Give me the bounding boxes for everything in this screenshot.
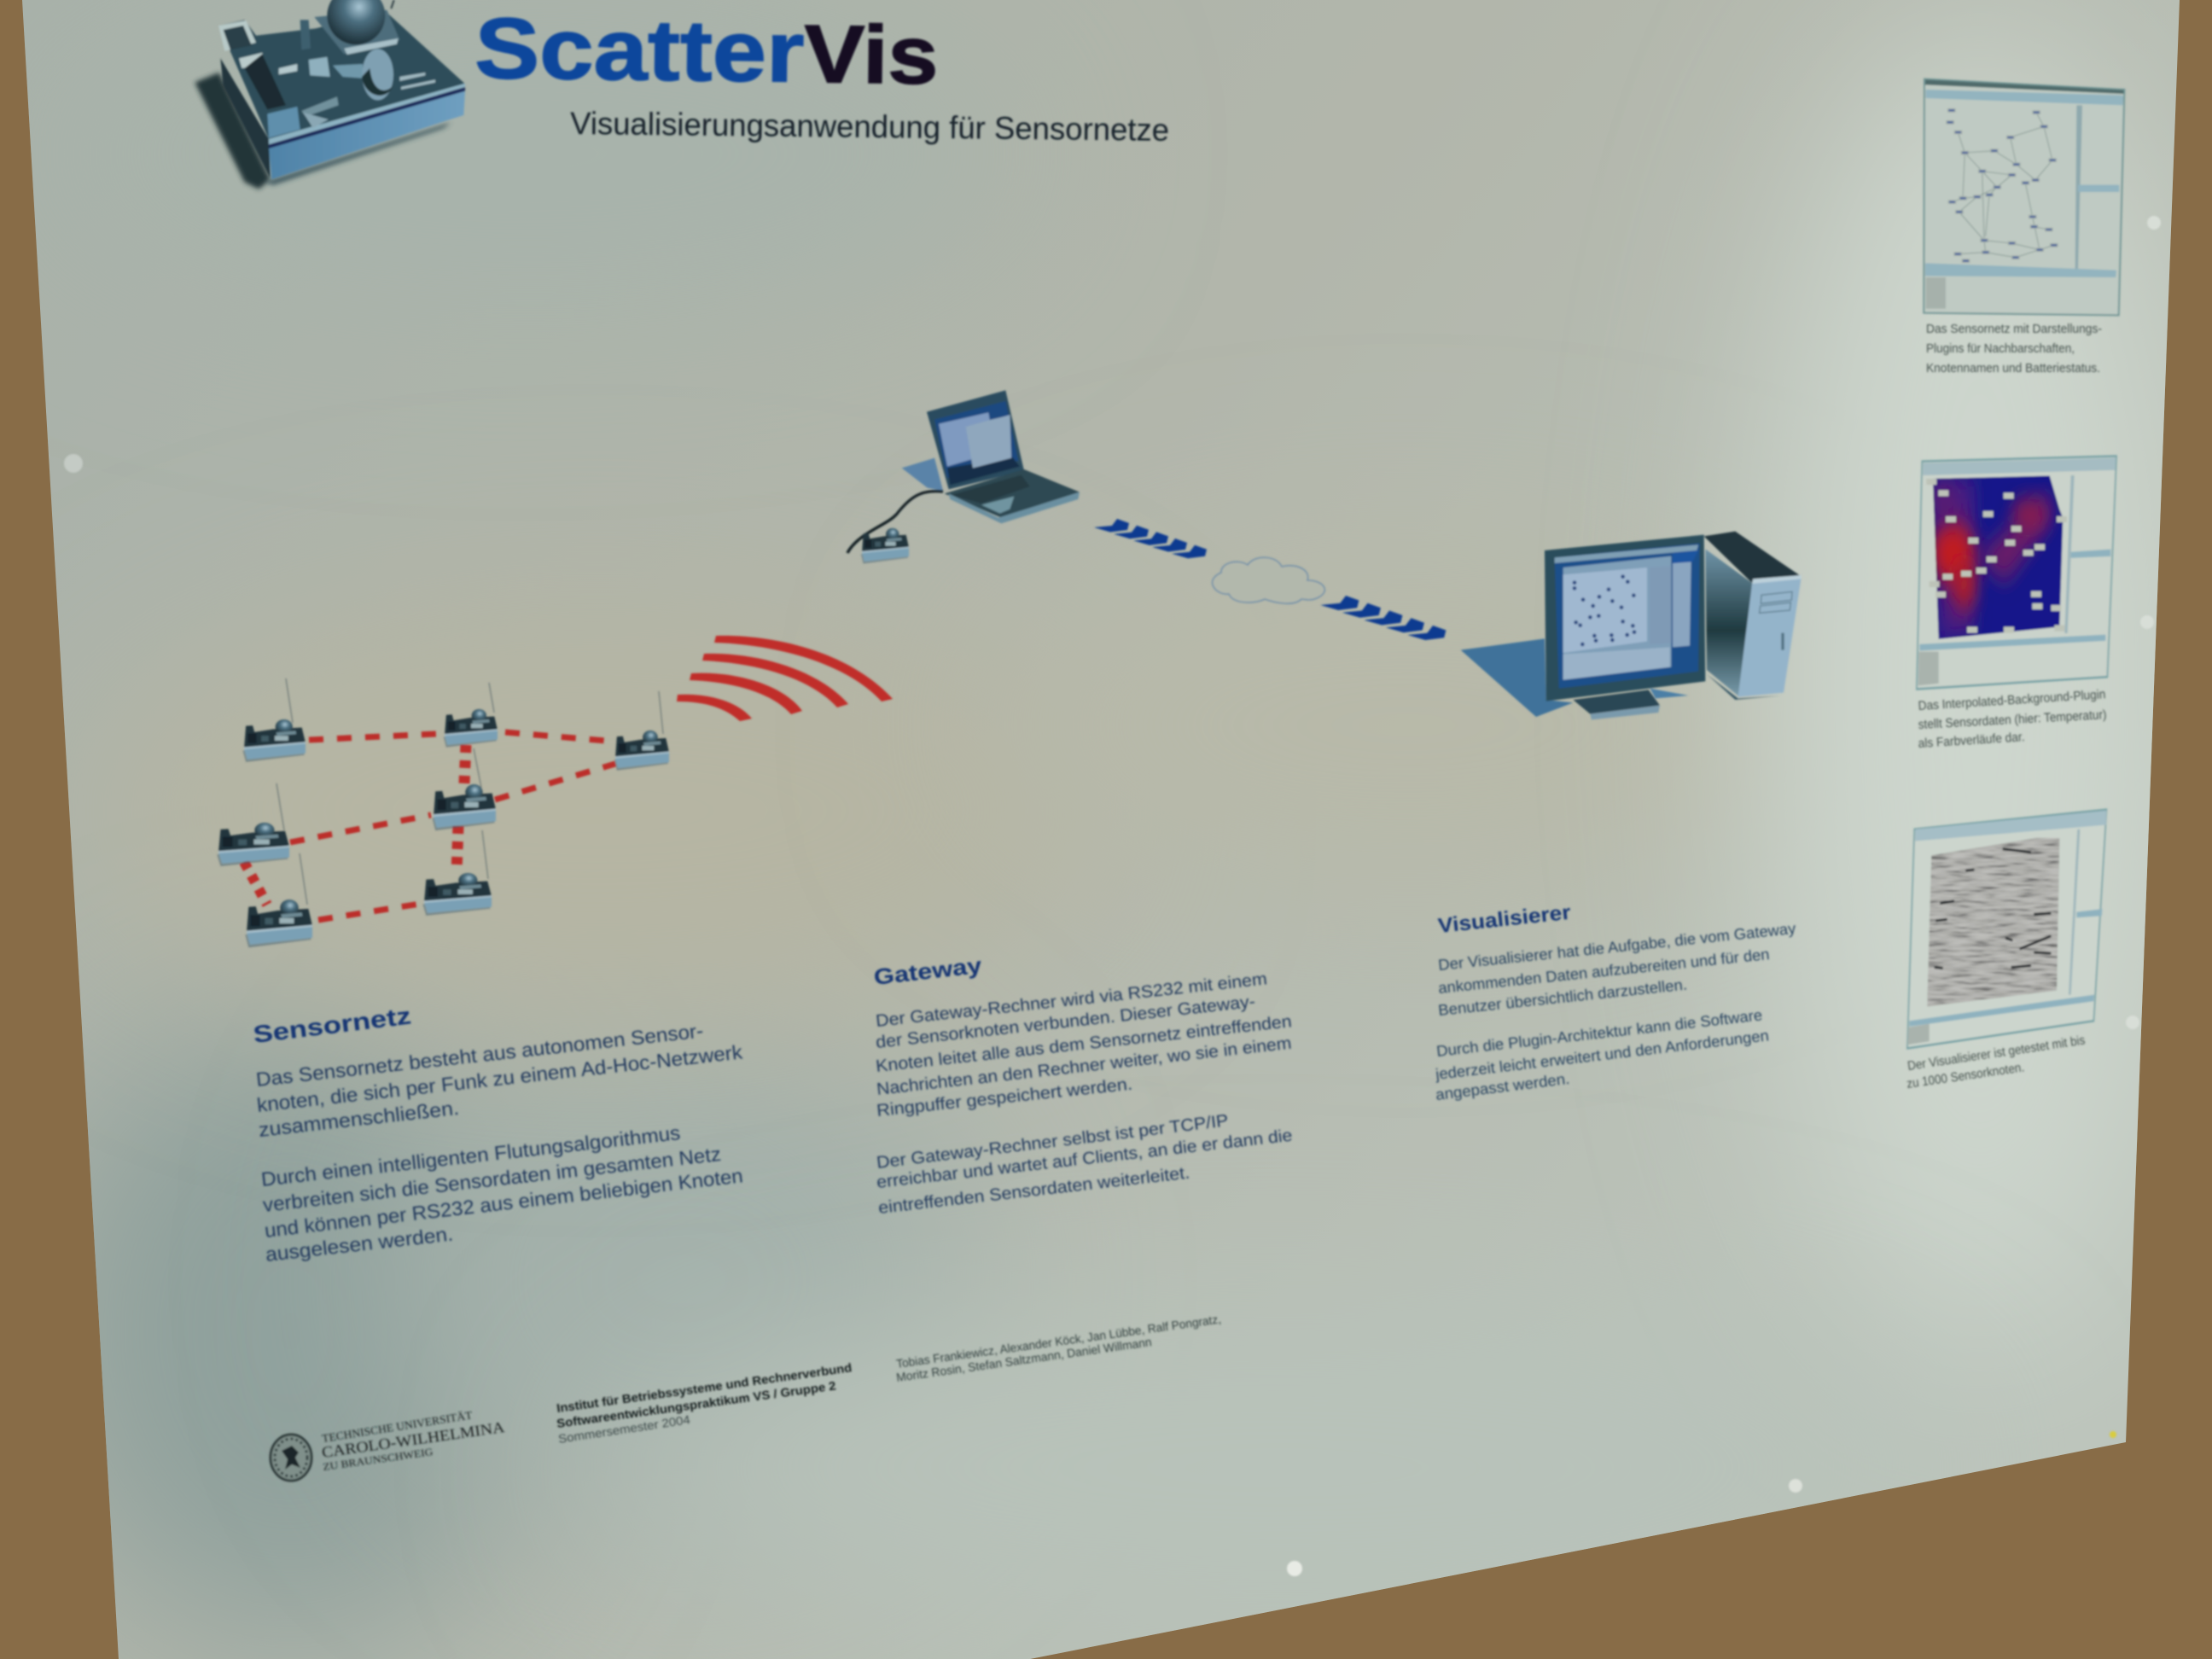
screenshot 2: interpolated temperature view bbox=[1917, 456, 2116, 689]
paragraphs: Knoten leitet alle aus dem Sensornetz eintreffenden bbox=[875, 1012, 1293, 1076]
paragraphs: Nachrichten an den Rechner weiter, wo sie in einem bbox=[876, 1034, 1293, 1099]
stand bbox=[1573, 690, 1660, 714]
paragraphs: Der Visualisierer hat die Aufgabe, die vom Gateway bbox=[1437, 920, 1796, 974]
paragraphs: Durch einen intelligenten Flutungsalgorithmus bbox=[260, 1121, 681, 1190]
caption 1 bbox=[1926, 322, 2102, 375]
monitor plot bbox=[1573, 574, 1636, 646]
logo dome bbox=[314, 10, 399, 54]
paragraphs: Das Sensornetz besteht aus autonomen Sensor- bbox=[255, 1019, 704, 1091]
caption 2: stellt Sensordaten (hier: Temperatur) bbox=[1918, 707, 2107, 732]
footer: authors: Moritz Rosin, Stefan Saltzmann, Daniel Willmann bbox=[895, 1335, 1152, 1384]
seal bbox=[271, 1435, 311, 1481]
laptop lid bbox=[927, 390, 1024, 489]
paragraphs: verbreiten sich die Sensordaten im gesamten Netz bbox=[262, 1143, 722, 1216]
arrow: gateway to cloud bbox=[1094, 519, 1207, 558]
caption 3 bbox=[1906, 1033, 2086, 1091]
text block: Gateway bbox=[872, 952, 1293, 1218]
paragraphs: Der Gateway-Rechner selbst ist per TCP/IP bbox=[876, 1111, 1230, 1173]
laptop base bbox=[945, 469, 1080, 518]
paragraphs: zusammenschließen. bbox=[258, 1097, 460, 1141]
paragraphs: und können per RS232 aus einem beliebigen Knoten bbox=[264, 1164, 744, 1242]
logo circuit board bbox=[219, 10, 465, 139]
heading: Sensornetz bbox=[252, 1003, 412, 1048]
caption 2: Das Interpolated-Background-Plugin bbox=[1918, 687, 2106, 713]
radio links bbox=[244, 732, 616, 920]
cable bbox=[847, 515, 896, 553]
title bbox=[474, 1, 939, 102]
caption 1: Plugins für Nachbarschaften, bbox=[1926, 341, 2075, 356]
header logo: sensor node bbox=[195, 0, 465, 189]
logo shadow bbox=[195, 73, 271, 189]
subtitle: Visualisierungsanwendung für Sensornetze bbox=[570, 106, 1169, 148]
title: Vis bbox=[804, 9, 939, 102]
radio waves bbox=[677, 636, 893, 721]
paragraphs: Durch die Plugin-Architektur kann die Software bbox=[1435, 1006, 1763, 1060]
icon: desktop computer bbox=[1461, 532, 1802, 719]
paragraphs bbox=[875, 969, 1293, 1218]
paragraphs: Benutzer übersichtlich darzustellen. bbox=[1437, 975, 1688, 1019]
paragraphs: Der Gateway-Rechner wird via RS232 mit einem bbox=[875, 969, 1268, 1031]
paragraphs: Ringpuffer gespeichert werden. bbox=[876, 1075, 1133, 1121]
desktop shadow bbox=[1461, 638, 1573, 717]
paragraphs: jederzeit leicht erweitert und den Anforderungen bbox=[1434, 1027, 1770, 1083]
university name bbox=[321, 1408, 505, 1473]
diagram: sensor network bbox=[217, 678, 669, 947]
screenshot 3: 1000 node stress test bbox=[1907, 810, 2106, 1048]
logo base bbox=[269, 91, 465, 179]
caption 1: Das Sensornetz mit Darstellungs- bbox=[1926, 322, 2102, 336]
caption 2 bbox=[1918, 687, 2107, 751]
paragraphs bbox=[255, 1019, 744, 1266]
heading: Gateway bbox=[872, 952, 983, 990]
university name: CAROLO-WILHELMINA bbox=[321, 1418, 505, 1461]
antennas bbox=[276, 678, 663, 905]
paragraphs: der Sensorknoten verbunden. Dieser Gateway- bbox=[875, 992, 1256, 1052]
footer: authors: Tobias Frankiewicz, Alexander Köck, Jan Lübbe, Ralf Pongratz, bbox=[895, 1312, 1222, 1371]
paragraphs bbox=[1434, 920, 1796, 1103]
paragraphs: angepasst werden. bbox=[1435, 1070, 1570, 1103]
paragraphs: knoten, die sich per Funk zu einem Ad-Hoc-Netzwerk bbox=[256, 1040, 744, 1116]
paragraphs: ausgelesen werden. bbox=[265, 1222, 454, 1266]
footer: institute: Sommersemester 2004 bbox=[557, 1412, 691, 1446]
text block: Visualisierer bbox=[1434, 901, 1796, 1103]
arrow: cloud to visualizer bbox=[1320, 596, 1446, 640]
heading: Visualisierer bbox=[1437, 901, 1572, 938]
paragraphs: ankommenden Daten aufzubereiten und für den bbox=[1437, 946, 1770, 997]
logo side bbox=[220, 58, 271, 178]
icon: network cloud bbox=[1213, 557, 1324, 603]
caption 3: Der Visualisierer ist getestet mit bis bbox=[1906, 1033, 2086, 1074]
footer: institute: Softwareentwicklungspraktikum VS / Gruppe 2 bbox=[556, 1378, 837, 1430]
footer: institute: Institut für Betriebssysteme und Rechnerverbund bbox=[556, 1360, 853, 1415]
title: Scatter bbox=[474, 1, 805, 101]
footer: university logo bbox=[271, 1408, 505, 1481]
pins bbox=[64, 216, 2161, 1576]
text block: Sensornetz bbox=[252, 1003, 744, 1266]
paragraphs: eintreffenden Sensordaten weiterleitet. bbox=[877, 1164, 1190, 1218]
icon: gateway laptop with sensor node bbox=[847, 390, 1080, 563]
caption 3: zu 1000 Sensorknoten. bbox=[1906, 1060, 2025, 1091]
caption 1: Knotennamen und Batteriestatus. bbox=[1926, 361, 2100, 375]
screenshot 1: network view bbox=[1924, 79, 2124, 315]
sensor nodes bbox=[217, 709, 669, 947]
tower bbox=[1704, 532, 1801, 583]
cable top bbox=[896, 492, 943, 515]
university name: TECHNISCHE UNIVERSITÄT bbox=[321, 1408, 473, 1445]
caption 2: als Farbverläufe dar. bbox=[1918, 730, 2025, 751]
monitor bbox=[1545, 535, 1705, 701]
footer: institute bbox=[556, 1360, 853, 1446]
paragraphs: erreichbar und wartet auf Clients, an die er dann die bbox=[876, 1126, 1293, 1192]
university name: ZU BRAUNSCHWEIG bbox=[322, 1446, 434, 1473]
laptop shadow bbox=[902, 458, 943, 491]
